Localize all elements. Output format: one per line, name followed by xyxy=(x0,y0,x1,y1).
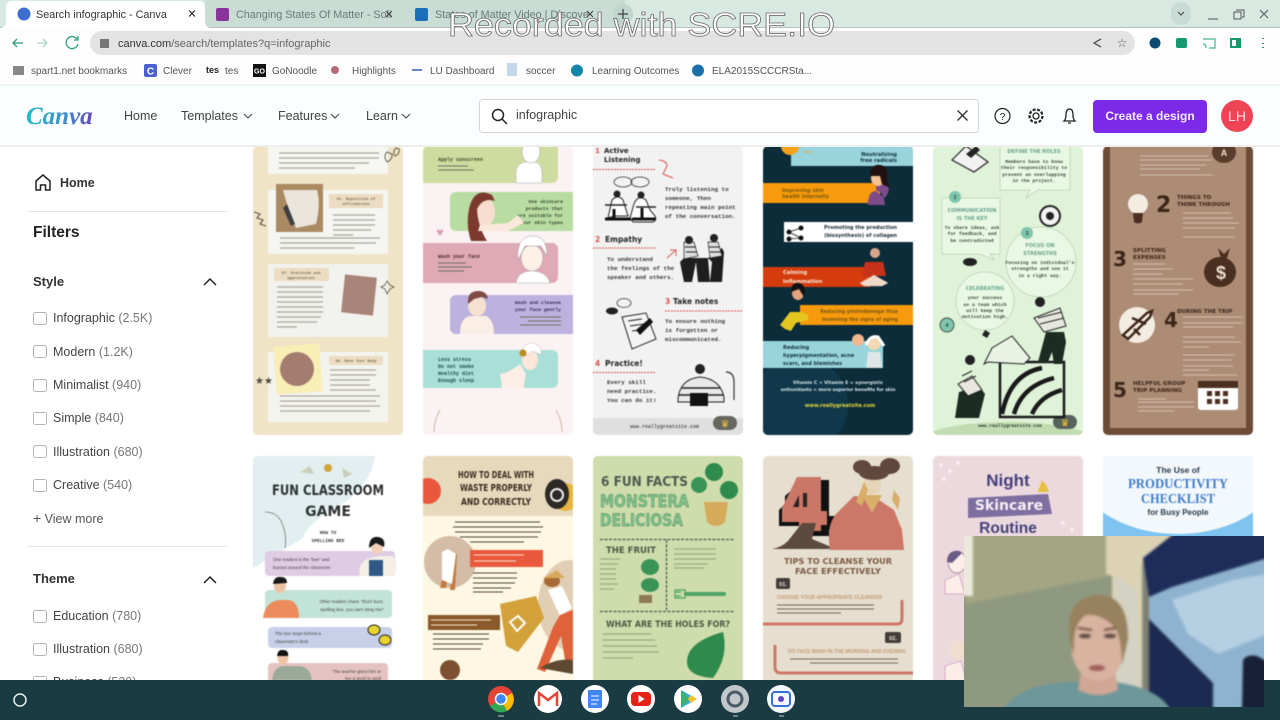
icon: settings xyxy=(1030,110,1042,122)
inactive tab: Changing States Of Matter - Soli xyxy=(236,9,391,21)
template card: reflection scrapbook xyxy=(253,145,403,435)
template card: group trip: DURING THE TRIP xyxy=(1177,309,1232,315)
icon: search xyxy=(492,110,507,124)
template card: group trip: $ xyxy=(1216,263,1226,283)
template card: skincare tips: Use skincare xyxy=(528,199,563,205)
template card: active listening: miscommunicated. xyxy=(665,336,722,343)
user avatar: LH xyxy=(1228,108,1246,124)
icon: home xyxy=(36,175,50,190)
template card: reflection scrapbook: 01. Repetition of xyxy=(337,197,376,202)
filter option labels: Illustration (680) xyxy=(53,642,143,656)
template card: teamwork: 4 xyxy=(946,323,949,329)
template card: group trip: HELPFUL GROUP xyxy=(1133,381,1185,387)
launcher xyxy=(14,694,26,706)
template card: night skincare routine: Routine xyxy=(979,520,1037,537)
search box xyxy=(480,100,978,132)
template card: vitamin C benefits: Vitamin C + Vitamin E = synergistic xyxy=(793,380,883,386)
template card: teamwork: 2 xyxy=(954,195,957,201)
forward arrow xyxy=(37,39,47,47)
template card: teamwork: Focusing on individual's xyxy=(1005,260,1075,266)
template card: vitamin C benefits: Improving skin xyxy=(782,188,824,194)
icon: help: ? xyxy=(1000,112,1006,123)
template card: fun classroom game: HOW TO xyxy=(320,530,337,536)
template card: vitamin C benefits: health internally xyxy=(782,194,830,200)
template card: teamwork: Members have to know xyxy=(1005,159,1063,165)
template card: vitamin C benefits: Reducing xyxy=(783,345,810,351)
template card: active listening: of the conversation. xyxy=(665,213,736,220)
filter option labels: Education (780) xyxy=(53,609,141,623)
template card: group trip: EXPENSES xyxy=(1133,255,1166,261)
navigation: Templates xyxy=(181,109,238,123)
template card: fun classroom game: classmate's desk xyxy=(275,639,309,644)
back arrow xyxy=(13,39,23,47)
template card: fun classroom game: The teacher gives him or xyxy=(333,669,382,674)
template card: active listening: 1 xyxy=(595,147,600,155)
template card: active listening: speaker and others. xyxy=(607,274,674,281)
template card: monstera facts: WHAT ARE THE HOLES FOR? xyxy=(606,620,730,630)
template card: active listening: www.reallygreatsite.com xyxy=(630,424,699,430)
template card: reflection scrapbook: appreciation xyxy=(287,276,315,281)
template card: productivity checklist xyxy=(1102,456,1254,536)
template card: deal with waste: WASTE PROPERLY xyxy=(460,483,532,494)
template card: active listening: is forgotten or xyxy=(665,327,718,334)
filter option labels: Creative (540) xyxy=(53,478,132,492)
template card: active listening: Truly listening to xyxy=(665,186,729,193)
template card: vitamin C benefits: free radicals xyxy=(860,158,897,164)
template card: vitamin C benefits: (biosynthesis) of collagen xyxy=(824,233,897,239)
template card: vitamin C benefits: antioxidants = more superior benefits for skin xyxy=(781,387,895,393)
bookmarks bar: tes xyxy=(225,66,238,77)
reload icon xyxy=(66,36,78,49)
webcam overlay xyxy=(960,532,1268,712)
navigation: Learn xyxy=(366,109,398,123)
bookmarks bar: Clever xyxy=(163,66,193,77)
template card: skincare tips: are suitable for xyxy=(517,213,563,219)
template card: group trip: SPLITTING xyxy=(1133,248,1166,254)
template card: fun classroom game: One readers is the "bee" and xyxy=(273,557,330,562)
template card: cleanse your face tips: FACE EFFECTIVELY xyxy=(795,566,882,576)
template card: monstera facts: MONSTERA xyxy=(600,492,690,512)
template card: vitamin C benefits: Calming xyxy=(783,270,807,276)
template card: skincare tips: Enough sleep xyxy=(438,378,474,384)
template card: teamwork: 3 xyxy=(1026,231,1029,237)
bookmarks bar: ELA2015SCCCRSta... xyxy=(712,66,812,77)
browser chrome: ☆ xyxy=(1117,36,1127,50)
template card: cleanse your face tips: DO FACE MASH IN THE MORNING AND EVENING xyxy=(788,649,906,655)
template card: teamwork: your success xyxy=(968,296,1002,301)
browser chrome xyxy=(0,0,1280,86)
template card: fun classroom game: SPELLING BEE xyxy=(311,538,345,544)
template card: active listening: 3 xyxy=(665,297,670,306)
template card: teamwork: CELEBRATING xyxy=(966,286,1004,292)
template card: monstera facts: 6 FUN FACTS xyxy=(601,474,688,490)
template card: deal with waste: HOW TO DEAL WITH xyxy=(458,470,534,481)
template card: skincare tips: Less stress xyxy=(438,357,471,363)
filter option labels: Infographic (2.5K) xyxy=(53,311,152,325)
template card: night skincare routine: Night xyxy=(986,471,1030,490)
inactive tab: States of Matter Video | Discove xyxy=(435,9,589,21)
template card: skincare tips: your skin types xyxy=(520,220,563,226)
template card: group trip: 3 xyxy=(1113,247,1127,271)
template card: active listening: To ensure nothing xyxy=(665,318,726,325)
filter option labels xyxy=(53,311,152,689)
template card: active listening: need practice. xyxy=(607,388,656,395)
filter option labels: Minimalist (940) xyxy=(53,378,141,392)
taskbar xyxy=(0,680,1280,720)
template card: active listening: someone, Then xyxy=(665,195,711,202)
template card: teamwork: DEFINE THE ROLES xyxy=(1007,149,1061,155)
template card: teamwork: ♛ xyxy=(1061,418,1069,429)
bookmarks bar xyxy=(13,63,812,78)
template card: reflection scrapbook: 07. Gratitude and xyxy=(282,271,321,276)
template card: productivity checklist: CHECKLIST xyxy=(1141,492,1216,507)
bookmarks bar: Highlights xyxy=(352,66,396,77)
bookmarks bar: C xyxy=(147,66,154,78)
template card: active listening: 2 xyxy=(595,235,600,244)
bookmarks bar: LU Dashboard xyxy=(430,66,494,77)
template card: active listening: You can do it! xyxy=(607,397,656,404)
icon: gmail xyxy=(534,685,562,713)
template card: reflection scrapbook: affirmations xyxy=(342,202,370,207)
template card: cleanse your face tips: 02. xyxy=(889,636,897,642)
template card: active listening: 4 xyxy=(595,359,600,368)
template card: fun classroom game: GAME xyxy=(305,504,351,520)
template card: fun classroom game: spelling bee, you can't sting me!" xyxy=(320,607,384,612)
bookmarks bar: GO xyxy=(254,68,265,76)
user avatar xyxy=(1221,100,1253,132)
new tab button xyxy=(613,4,633,24)
extension icons xyxy=(1150,38,1263,48)
template card: fun classroom game: FUN CLASSROOM xyxy=(272,483,384,499)
template card: active listening: Practice! xyxy=(605,359,643,368)
create a design button xyxy=(1093,100,1207,133)
template card: active listening: Every skill xyxy=(607,379,646,386)
template card: teamwork: FOCUS ON xyxy=(1025,243,1055,249)
template card: teamwork: in the project. xyxy=(1012,178,1056,184)
template card: active listening: Take notes xyxy=(673,297,719,306)
template card: active listening: Active xyxy=(604,147,629,155)
template card: teamwork: for feedback, and xyxy=(948,231,997,237)
template card: night skincare routine xyxy=(933,456,1083,686)
template card: teamwork: motivation high. xyxy=(962,314,1008,320)
template card: fun classroom game: her a word to spell xyxy=(345,676,381,681)
theme filter heading: Theme xyxy=(33,571,75,586)
template card: productivity checklist: for Busy People xyxy=(1148,508,1209,517)
template card: monstera facts xyxy=(593,456,743,686)
active tab: Search infographic - Canva xyxy=(36,9,167,21)
template card: teamwork: www.reallygreatsite.com xyxy=(978,423,1042,429)
icon: settings app xyxy=(721,685,749,713)
tab search button xyxy=(1171,2,1191,25)
template card: teamwork: strengths and use it xyxy=(1011,266,1069,272)
template card: skincare tips xyxy=(422,147,574,435)
template card: night skincare routine: Skincare xyxy=(975,498,1043,514)
template card: teamwork: COMMUNICATION xyxy=(948,208,996,214)
icon: screen recorder xyxy=(767,685,795,713)
navigation xyxy=(124,109,398,123)
template card: vitamin C benefits xyxy=(762,147,914,436)
template card: vitamin C benefits: lessening the signs of aging xyxy=(822,317,899,323)
template card: teamwork: STRENGTHS xyxy=(1023,251,1057,257)
create a design button: Create a design xyxy=(1105,109,1195,123)
address bar xyxy=(90,31,1135,55)
template card: cleanse your face tips: 01. xyxy=(779,582,787,588)
sidebar xyxy=(0,146,245,689)
style filter heading: Style xyxy=(33,274,64,289)
template card: group trip: 2 xyxy=(1156,193,1171,218)
navigation: Features xyxy=(278,109,327,123)
template card: skincare tips: products that xyxy=(526,206,563,212)
navigation: Home xyxy=(124,109,157,123)
template card: reflection scrapbook: ★★ xyxy=(255,376,273,387)
bookmarks bar: soccer xyxy=(526,66,556,77)
template card: group trip xyxy=(1103,140,1253,435)
template card: vitamin C benefits: Reducing photodamage thus xyxy=(820,309,898,315)
recording watermark: Recorded with SCRE.IO xyxy=(448,6,835,43)
template card: vitamin C benefits: hyperpigmentation, acne xyxy=(783,353,855,359)
template card: productivity checklist: The Use of xyxy=(1156,465,1200,475)
search text: infographic xyxy=(516,108,577,122)
icon: bell xyxy=(1064,109,1075,123)
filters heading: Filters xyxy=(33,224,80,241)
template card: teamwork: will keep the xyxy=(966,308,1004,314)
template card: teamwork: be contradicted xyxy=(950,238,994,244)
bookmarks bar: spart1.net bookmarks xyxy=(31,66,127,77)
template card: active listening: repeating main point xyxy=(665,204,736,211)
filter option labels: Simple (840) xyxy=(53,411,124,425)
template card: monstera facts: DELICIOSA xyxy=(600,511,684,531)
template card: active listening: ♛ xyxy=(721,419,729,430)
icon: docs xyxy=(581,685,609,713)
row 1 template cards xyxy=(253,137,1253,458)
view more link: + View more xyxy=(33,510,104,526)
template card: skincare tips: Apply sunscreen xyxy=(438,157,483,163)
canva logo: Canva xyxy=(26,103,93,130)
template card: teamwork: as a team which xyxy=(963,302,1007,308)
home link: Home xyxy=(60,176,95,190)
bookmarks bar: GoNoodle xyxy=(272,66,317,77)
bookmarks bar: tes xyxy=(206,65,219,75)
template card: vitamin C benefits: www.reallygreatsite.com xyxy=(805,403,875,409)
template card: active listening: Listening xyxy=(604,156,640,164)
filter option labels: Illustration (680) xyxy=(53,445,143,459)
template card: group trip: A xyxy=(1221,148,1228,158)
template card: cleanse your face tips: CHOOSE YOUR APPROPRIATE CLEANSER xyxy=(777,595,883,601)
template card: group trip: 4 xyxy=(1164,308,1178,332)
template card: vitamin C benefits: Promoting the production xyxy=(824,225,897,231)
template card: group trip: 5 xyxy=(1113,378,1127,402)
template card: active listening: Empathy xyxy=(605,235,642,244)
template card: vitamin C benefits: inflammation xyxy=(783,279,823,285)
template card: teamwork: IS THE KEY xyxy=(957,216,988,222)
filter option labels: Business (520) xyxy=(53,675,136,689)
template card: teamwork: prevent an overlapping xyxy=(1002,172,1066,178)
icon: youtube xyxy=(627,685,655,713)
icon: chrome xyxy=(488,686,514,712)
template card: reflection scrapbook: 08. Move Your Body xyxy=(335,359,377,364)
address bar icons xyxy=(1094,39,1101,47)
filter option labels: Modern (1.2K) xyxy=(53,345,133,359)
template card: skincare tips: your face gently xyxy=(515,307,561,313)
template card: active listening: the feelings of the xyxy=(607,265,675,272)
template card: group trip: THINK THROUGH xyxy=(1177,202,1230,208)
template card: active listening: To understand xyxy=(607,256,653,263)
template card: skincare tips: Wash your face xyxy=(438,254,480,260)
template card: vitamin C benefits: scars, and blemishes xyxy=(783,361,842,367)
template card: fun classroom game: buzzes around the classroom xyxy=(273,565,331,570)
template card: skincare tips: Wash and cleanse xyxy=(515,300,561,306)
bookmarks bar: Learning Outcomes xyxy=(592,66,679,77)
active tab xyxy=(0,1,211,28)
template card: fun classroom game xyxy=(253,456,403,687)
template card: cleanse your face tips: TIPS TO CLEANSE YOUR xyxy=(784,556,893,566)
template card: monstera facts: THE FRUIT xyxy=(606,546,656,556)
template card: productivity checklist: PRODUCTIVITY xyxy=(1128,477,1228,492)
template card: vitamin C benefits: Neutralizing xyxy=(861,152,897,158)
template card: deal with waste: AND CORRECTLY xyxy=(461,497,531,508)
template card: cleanse your face tips xyxy=(763,456,913,686)
template card: skincare tips: Healthy diet xyxy=(438,371,474,377)
icon: play store xyxy=(674,685,702,713)
row 2 template cards xyxy=(252,456,1254,680)
template card: fun classroom game: The bee stops behind a xyxy=(275,631,321,636)
browser chrome: canva.com/search/templates?q=infographic xyxy=(118,38,331,50)
template card: group trip: THINGS TO xyxy=(1177,195,1212,201)
big number 4 xyxy=(779,477,835,536)
canva header xyxy=(0,85,1280,147)
template card: teamwork: in a right way. xyxy=(1018,273,1062,279)
template card: group trip: TRIP PLANNING xyxy=(1133,388,1182,394)
template card: active listening xyxy=(593,146,743,435)
template card: skincare tips: Do not smoke xyxy=(438,364,474,370)
template card: teamwork xyxy=(932,147,1084,436)
template card: fun classroom game: Other readers chant: "Buzz buzz, xyxy=(319,599,384,604)
template card: teamwork: their responsibility to xyxy=(1001,165,1067,171)
template card: teamwork: To share ideas, ask xyxy=(945,225,999,231)
icon: help xyxy=(995,108,1010,124)
template card: deal with waste xyxy=(422,456,574,680)
